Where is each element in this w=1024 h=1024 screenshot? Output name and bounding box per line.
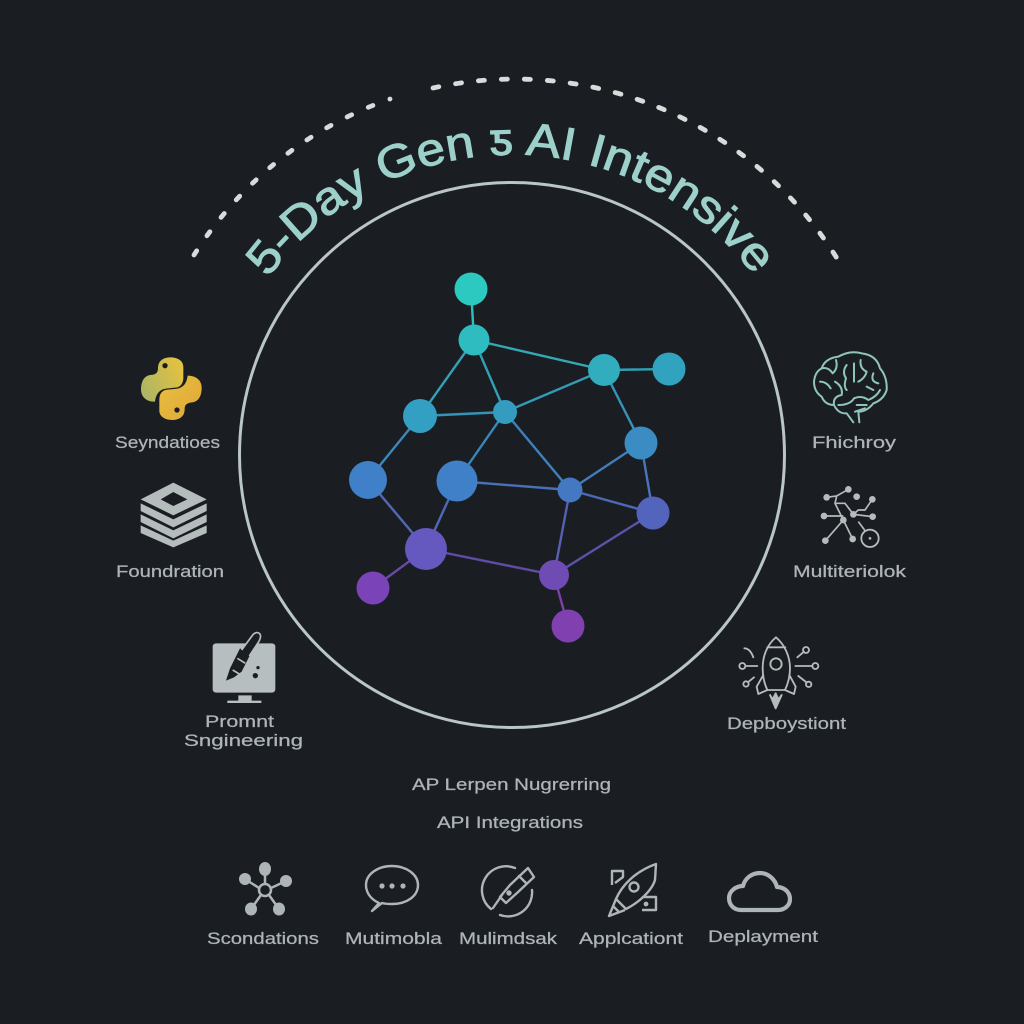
label: Promnt Sngineering [184, 713, 303, 750]
node 15 [552, 610, 584, 642]
node 12 [405, 528, 447, 570]
node 9 [436, 460, 478, 502]
node 6 [493, 400, 517, 424]
title: 5-Day Gen ƽ AI Intensive [245, 124, 768, 274]
icon: rocket small [609, 864, 656, 916]
node 2 [458, 324, 490, 356]
icon: brain [814, 352, 887, 422]
node 5 [403, 399, 437, 433]
icon: layers [141, 483, 207, 547]
icon: molecule [239, 862, 292, 916]
main circle [240, 182, 784, 728]
icon: cloud [729, 873, 790, 910]
node 13 [539, 560, 569, 590]
node 7 [624, 426, 658, 460]
network graph [349, 272, 686, 642]
label: Applcationt: Applcationt [579, 930, 684, 948]
dashed arc [194, 79, 841, 265]
node 10 [558, 478, 582, 502]
icon: network [821, 486, 879, 547]
node 11 [636, 496, 670, 530]
node 8 [349, 461, 387, 499]
icon: monitor with pen [213, 633, 275, 703]
text: AP Lerpen Nugrerring: AP Lerpen Nugrerring [412, 776, 611, 794]
icon: rocket [739, 637, 818, 708]
label: Foundration: Foundration [116, 563, 224, 581]
label: Multiteriolok: Multiteriolok [793, 563, 907, 581]
label: Promnt Sngineering: Promnt [205, 713, 275, 731]
label: Mutimobla: Mutimobla [345, 930, 443, 948]
icon: pen in circle [482, 866, 534, 916]
node 4 [652, 352, 686, 386]
label: Mulimdsak: Mulimdsak [459, 930, 558, 948]
label: Promnt Sngineering: Sngineering [184, 732, 303, 750]
label: Fhichroy: Fhichroy [812, 434, 897, 452]
icon: python [141, 357, 202, 420]
label: Scondations: Scondations [207, 930, 319, 948]
label: Seyndatioes: Seyndatioes [115, 434, 220, 452]
node 14 [356, 572, 390, 604]
node 3 [588, 354, 620, 386]
icon: chat bubble [366, 866, 418, 911]
node 1 [454, 272, 488, 306]
label: Depboystiont: Depboystiont [727, 715, 847, 733]
text: API Integrations: API Integrations [437, 814, 583, 832]
label: Deplayment: Deplayment [708, 928, 819, 946]
